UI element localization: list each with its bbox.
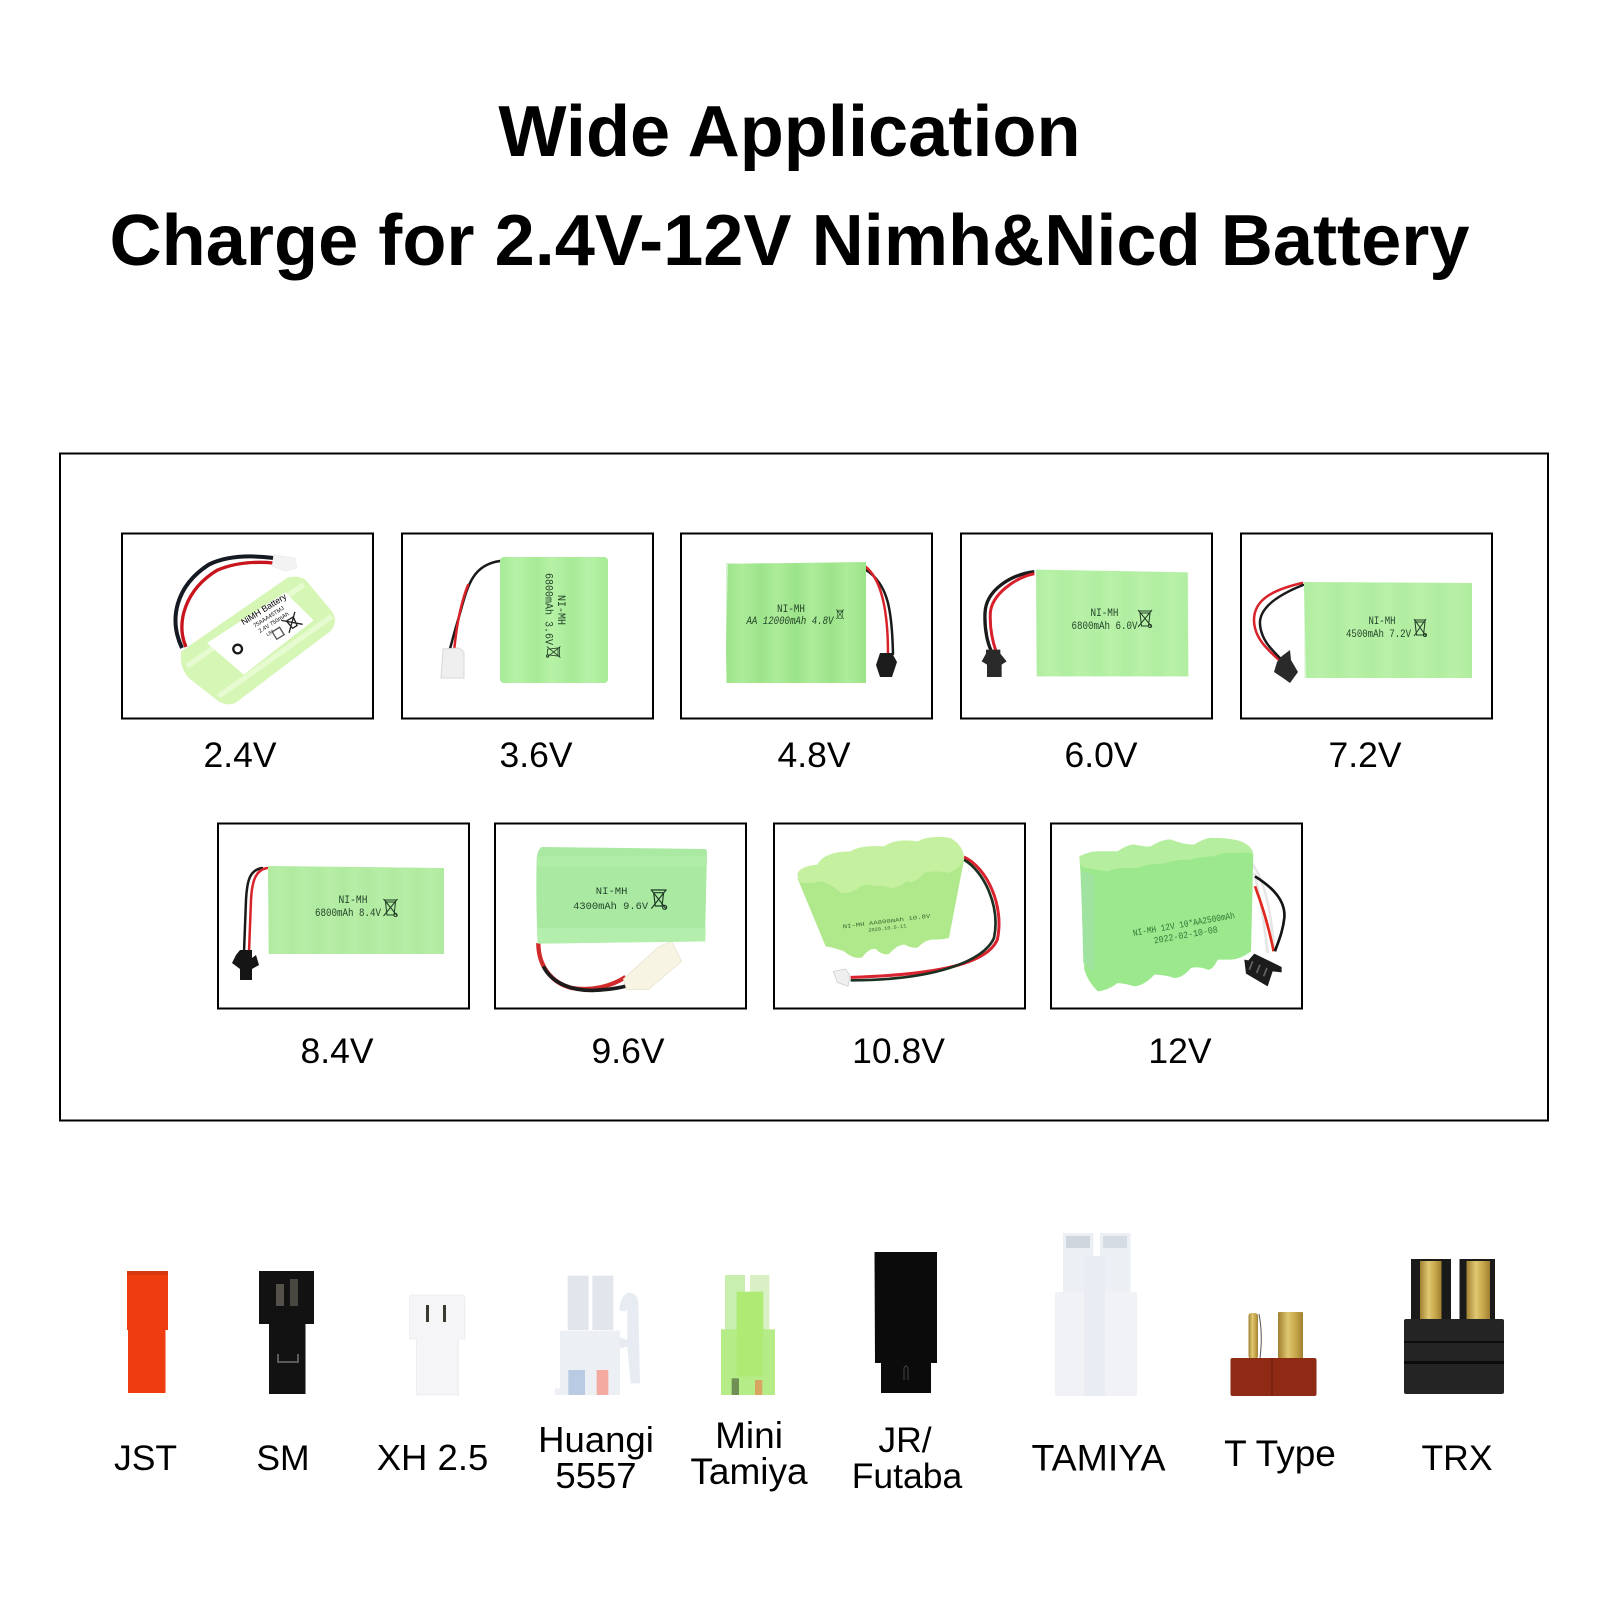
- voltage label: 7.2V: 7.2V: [1328, 735, 1402, 775]
- voltage label: 9.6V: 9.6V: [591, 1031, 665, 1071]
- battery card: 9.6V: NI-MH: [596, 886, 627, 897]
- battery card: 8.4V: NI-MH: [338, 895, 368, 907]
- battery card: 2.4V: 75AAA45TMJ: [253, 606, 286, 629]
- connector: T Type: [1230, 1312, 1316, 1396]
- battery card: 10.8V: [774, 824, 1025, 1008]
- label: JR/Futaba: JR/: [878, 1420, 932, 1460]
- label: JST: JST: [114, 1438, 177, 1478]
- battery card: 6.0V: [961, 534, 1212, 718]
- label: JR/Futaba: [852, 1420, 963, 1496]
- battery card: 7.2V: [1241, 534, 1492, 718]
- voltage label: 4.8V: 4.8V: [777, 735, 851, 775]
- connector: JR/Futaba: [874, 1252, 937, 1393]
- battery card: 12V: [1051, 824, 1302, 1008]
- label: SM: SM: [256, 1438, 310, 1478]
- battery card: 4.8V: [681, 534, 932, 718]
- battery card: 12V: 2022-02-10-08: [1153, 924, 1219, 946]
- battery card: 8.4V: 6800mAh 8.4V: [315, 908, 381, 920]
- battery card: 3.6V: 6800mAh 3.6V: [542, 573, 554, 645]
- battery card: 6.0V: 6800mAh 6.0V: [1072, 621, 1138, 633]
- voltage label: 10.8V: 10.8V: [852, 1031, 945, 1071]
- label: Mini Tamiya: Tamiya: [690, 1451, 808, 1492]
- voltage label: 6.0V: 6.0V: [1064, 735, 1138, 775]
- battery card: 7.2V: NI-MH: [1368, 616, 1396, 628]
- label: Huangi 5557: 5557: [555, 1455, 637, 1496]
- title: Wide Application: [498, 92, 1081, 172]
- battery card: 2.4V: NiMH Battery: [239, 591, 289, 627]
- connector: SM: [259, 1271, 314, 1394]
- battery card: 12V: NI-MH 12V 10*AA2500mAh: [1132, 910, 1236, 939]
- battery card: 3.6V: [402, 534, 653, 718]
- label: Huangi 5557: [538, 1419, 654, 1496]
- battery card: 2.4V: L84: [265, 629, 275, 637]
- voltage label: 2.4V: 2.4V: [203, 735, 277, 775]
- label: TRX: TRX: [1422, 1438, 1492, 1478]
- connector: JST: [127, 1271, 168, 1393]
- connector: TAMIYA: [1055, 1233, 1137, 1396]
- voltage label: 8.4V: 8.4V: [300, 1031, 374, 1071]
- label: JR/Futaba: Futaba: [852, 1456, 963, 1496]
- connector: XH 2.5: [410, 1295, 465, 1395]
- title: [110, 92, 1469, 281]
- battery card: 2.4V: 2.4V 750mAh: [258, 611, 290, 635]
- panel: connector types: [114, 1233, 1504, 1496]
- battery card: 4.8V: AA 12000mAh 4.8V: [746, 616, 835, 628]
- battery card: 10.8V: 2020.10.9.11: [868, 923, 907, 934]
- panel: supported battery voltages: [60, 454, 1548, 1120]
- label: T Type: T Type: [1224, 1433, 1336, 1474]
- title: Charge for 2.4V-12V Nimh&Nicd Battery: [110, 201, 1469, 281]
- battery card: 10.8V: NI-MH AA800mAh 10.8V: [842, 913, 932, 930]
- label: TAMIYA: TAMIYA: [1031, 1436, 1166, 1478]
- connector: Mini Tamiya: [721, 1275, 775, 1395]
- battery card: 9.6V: 4300mAh 9.6V: [573, 901, 648, 912]
- battery card: 2.4V: [122, 534, 373, 718]
- label: Huangi 5557: Huangi: [538, 1419, 654, 1460]
- battery card: 7.2V: 4500mAh 7.2V: [1346, 629, 1411, 641]
- battery card: 4.8V: NI-MH: [777, 604, 805, 616]
- label: Mini Tamiya: [690, 1415, 808, 1492]
- voltage label: 12V: 12V: [1148, 1031, 1212, 1071]
- battery card: 6.0V: NI-MH: [1090, 608, 1118, 620]
- connector: Huangi 5557: [555, 1276, 640, 1395]
- label: Mini Tamiya: Mini: [715, 1415, 783, 1456]
- battery card: 8.4V: [218, 824, 469, 1008]
- label: XH 2.5: XH 2.5: [377, 1437, 488, 1478]
- connector: TRX: [1404, 1259, 1504, 1394]
- voltage label: 3.6V: 3.6V: [499, 735, 573, 775]
- battery card: 3.6V: NI-MH: [554, 595, 566, 625]
- battery card: 9.6V: [495, 824, 746, 1008]
